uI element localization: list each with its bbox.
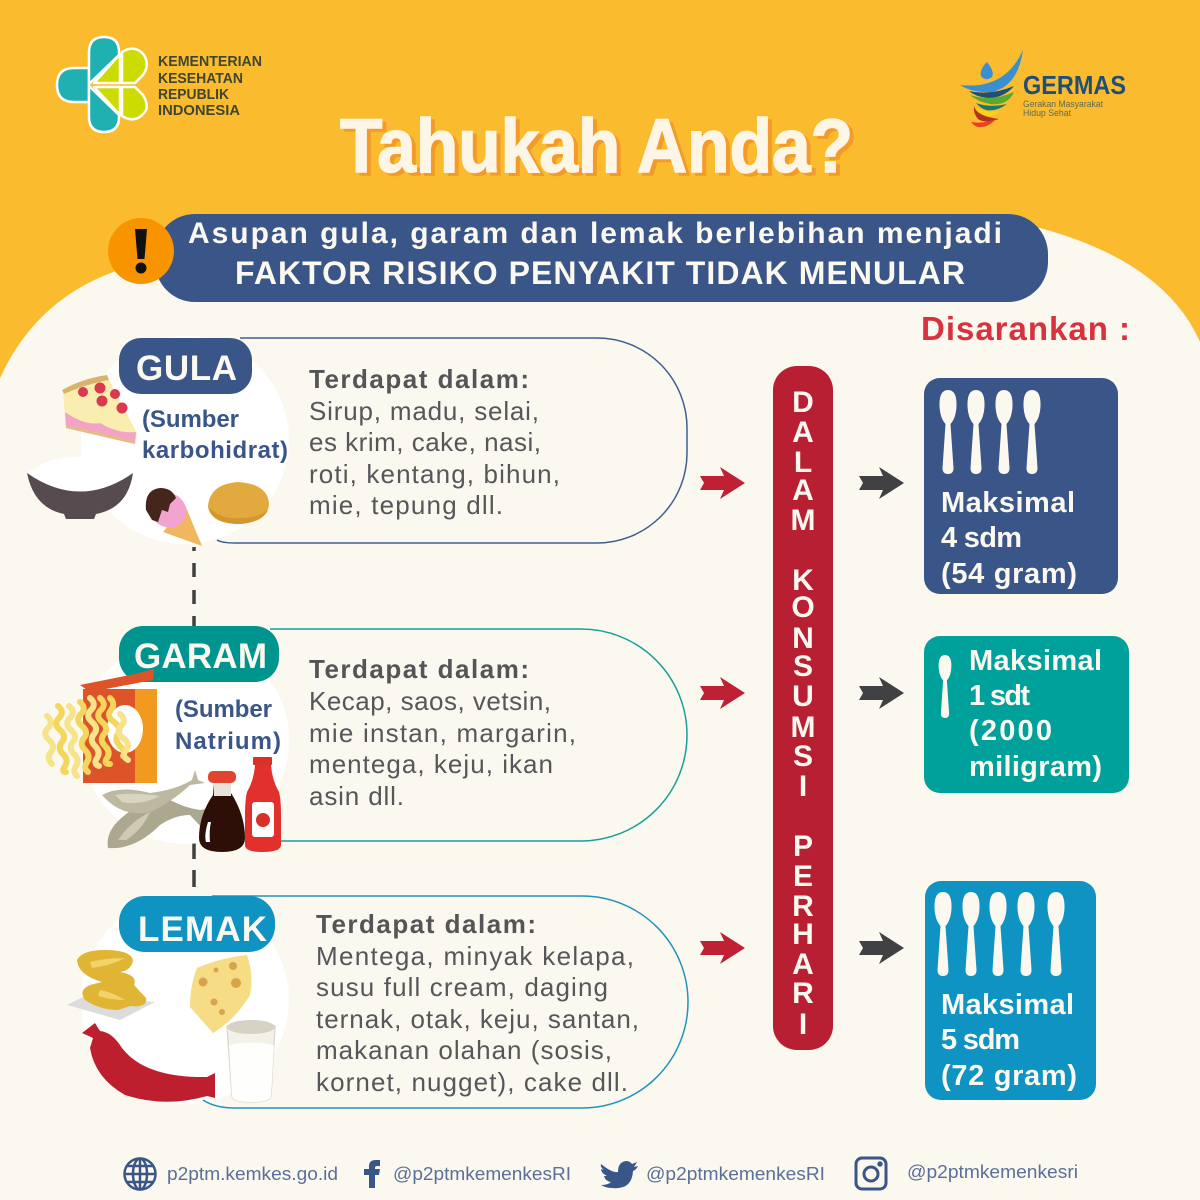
panel: gula: karbohidrat) — [142, 437, 288, 464]
logo: Kementerian Kesehatan — [57, 37, 262, 132]
panel: garam limit — [924, 636, 1129, 793]
icon: facebook — [364, 1160, 380, 1188]
panel: lemak limit: Maksimal — [941, 989, 1074, 1021]
panel: gula: es krim, cake, nasi, — [309, 427, 541, 457]
icon: rice bowl — [27, 457, 133, 519]
icon: potato — [208, 482, 269, 524]
panel: garam: (Sumber — [175, 696, 272, 723]
icon: instagram — [856, 1158, 886, 1189]
icon: salted fish — [102, 770, 207, 848]
panel: gula: mie, tepung dll. — [309, 490, 503, 520]
panel: garam: Kecap, saos, vetsin, — [309, 686, 551, 716]
panel: garam — [45, 626, 687, 852]
panel: garam: asin dll. — [309, 781, 404, 811]
vertical bar: dalam konsumsi perhari: I — [799, 770, 807, 803]
footer: social links: @p2ptmkemenkesri — [907, 1162, 1078, 1182]
vertical bar: dalam konsumsi perhari: S — [793, 740, 813, 773]
panel: gula limit: Maksimal — [941, 487, 1075, 519]
footer: social links: @p2ptmkemenkesRI — [393, 1164, 571, 1184]
panel: lemak — [67, 896, 688, 1108]
panel: garam limit: (2000 — [969, 715, 1052, 747]
icon: ice cream cone — [143, 485, 202, 546]
arrow: red — [700, 677, 745, 709]
panel: garam limit: miligram) — [969, 751, 1102, 783]
logo: Kementerian Kesehatan: KESEHATAN — [158, 70, 243, 87]
panel: lemak: Mentega, minyak kelapa, — [316, 941, 634, 971]
vertical bar: dalam konsumsi perhari: L — [794, 446, 812, 479]
panel: lemak: Terdapat dalam: — [316, 909, 536, 939]
panel: lemak limit: 5 sdm — [941, 1024, 1020, 1056]
panel: garam: mie instan, margarin, — [309, 718, 576, 748]
panel: gula: GULA — [136, 349, 237, 388]
arrow: dark — [859, 932, 904, 964]
arrow: dark — [859, 467, 904, 499]
connector dashes — [192, 547, 196, 887]
icon: glass of milk — [227, 1020, 275, 1102]
footer: social links: @p2ptmkemenkesRI — [646, 1164, 825, 1184]
logo: GERMAS: GERMAS — [1023, 70, 1126, 100]
vertical bar: dalam konsumsi perhari — [773, 366, 833, 1050]
vertical bar: dalam konsumsi perhari: R — [792, 977, 814, 1010]
icon: sausage — [82, 1023, 215, 1102]
vertical bar: dalam konsumsi perhari: H — [792, 918, 814, 951]
panel: lemak: susu full cream, daging — [316, 972, 608, 1002]
arrow: red — [700, 467, 745, 499]
vertical bar: dalam konsumsi perhari: U — [792, 680, 814, 713]
panel: lemak: kornet, nugget), cake dll. — [316, 1067, 628, 1097]
vertical bar: dalam konsumsi perhari: I — [799, 1008, 807, 1041]
title: Tahukah Anda? — [344, 107, 857, 192]
panel: garam limit: Maksimal — [969, 645, 1102, 677]
icon: warning exclamation — [108, 218, 174, 284]
vertical bar: dalam konsumsi perhari: M — [790, 504, 816, 537]
banner: risk factor message: Asupan gula, garam dan lemak berlebihan menjadi — [188, 217, 1002, 250]
panel: lemak: ternak, otak, keju, santan, — [316, 1004, 639, 1034]
panel: lemak: makanan olahan (sosis, — [316, 1035, 612, 1065]
panel: lemak limit — [925, 881, 1096, 1100]
panel: garam: Natrium) — [175, 728, 281, 755]
logo: GERMAS: Hidup Sehat — [1023, 108, 1071, 118]
panel: gula: (Sumber — [142, 406, 239, 433]
icon: soy sauce bottle — [199, 771, 245, 852]
vertical bar: dalam konsumsi perhari: E — [793, 860, 813, 893]
logo: GERMAS — [960, 50, 1126, 127]
vertical bar: dalam konsumsi perhari: M — [790, 711, 816, 744]
panel: gula: roti, kentang, bihun, — [309, 459, 560, 489]
vertical bar: dalam konsumsi perhari: O — [791, 591, 815, 624]
footer: social links — [124, 1158, 1078, 1190]
icon: ketchup bottle — [245, 757, 281, 852]
panel: gula — [27, 336, 687, 546]
logo: GERMAS: Gerakan Masyarakat — [1023, 99, 1103, 109]
panel: garam: mentega, keju, ikan — [309, 749, 553, 779]
icon: globe — [124, 1158, 156, 1190]
logo: Kementerian Kesehatan: INDONESIA — [158, 102, 240, 119]
icon: twitter — [601, 1161, 638, 1188]
banner: risk factor message — [155, 214, 1048, 302]
icon: nuggets — [67, 950, 155, 1020]
vertical bar: dalam konsumsi perhari: R — [792, 890, 814, 923]
panel: garam: Terdapat dalam: — [309, 654, 529, 684]
panel: gula limit — [924, 378, 1118, 594]
panel: garam: GARAM — [134, 637, 267, 676]
vertical bar: dalam konsumsi perhari: K — [792, 564, 814, 597]
banner: risk factor message: FAKTOR RISIKO PENYAKIT TIDAK MENULAR — [235, 255, 965, 291]
vertical bar: dalam konsumsi perhari: A — [792, 474, 814, 507]
heading: recommended: Disarankan : — [921, 310, 1130, 347]
logo: Kementerian Kesehatan: REPUBLIK — [158, 86, 229, 103]
footer: social links: p2ptm.kemkes.go.id — [167, 1164, 338, 1184]
arrow: red — [700, 932, 745, 964]
panel: gula limit: 4 sdm — [941, 522, 1022, 554]
panel: gula: Sirup, madu, selai, — [309, 396, 539, 426]
vertical bar: dalam konsumsi perhari: S — [793, 650, 813, 683]
vertical bar: dalam konsumsi perhari: P — [793, 830, 813, 863]
icon: cake slice — [62, 375, 137, 444]
panel: gula: Terdapat dalam: — [309, 364, 529, 394]
panel: garam limit: 1 sdt — [969, 680, 1030, 712]
icon: instant noodle pack — [45, 669, 157, 783]
vertical bar: dalam konsumsi perhari: N — [792, 622, 814, 655]
arrow: dark — [859, 677, 904, 709]
panel: lemak: LEMAK — [138, 910, 267, 949]
title: Tahukah Anda? — [340, 104, 853, 189]
icon: cheese wedge — [190, 955, 251, 1033]
vertical bar: dalam konsumsi perhari: D — [792, 386, 814, 419]
logo: Kementerian Kesehatan: KEMENTERIAN — [158, 53, 262, 70]
vertical bar: dalam konsumsi perhari: A — [792, 948, 814, 981]
panel: lemak limit: (72 gram) — [941, 1060, 1077, 1092]
vertical bar: dalam konsumsi perhari: A — [792, 416, 814, 449]
panel: gula limit: (54 gram) — [941, 558, 1077, 590]
